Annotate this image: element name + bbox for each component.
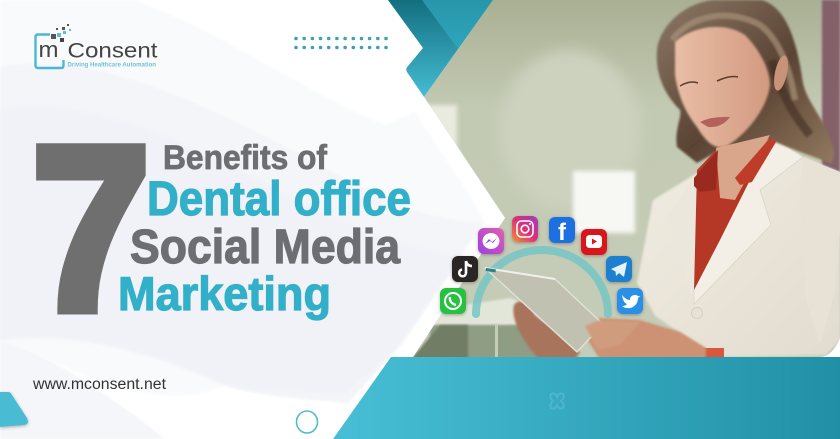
dot grid — [294, 37, 388, 49]
reach arc — [476, 250, 608, 314]
bottom teal band — [333, 357, 840, 439]
woman's hair — [657, 0, 834, 163]
icon: tiktok — [452, 256, 478, 282]
icon: instagram — [512, 216, 538, 242]
fingers over tablet — [585, 320, 640, 350]
woman's coat — [637, 140, 840, 357]
left teal tab — [0, 392, 28, 427]
website url: www.mconsent.net — [32, 376, 167, 393]
icon: facebook — [549, 217, 575, 246]
icon: faint cross mark — [550, 393, 564, 409]
icon: whatsapp — [440, 288, 466, 314]
icon: twitter — [617, 288, 643, 314]
right hand — [587, 318, 706, 360]
white edge band — [416, 97, 505, 224]
logo wordmark: Consent — [68, 38, 158, 62]
photo background wall — [400, 0, 840, 360]
social icons — [440, 216, 643, 314]
red shirt and neck — [694, 135, 776, 290]
cuff — [703, 348, 724, 357]
icon: telegram — [606, 256, 632, 282]
icon: messenger — [478, 228, 504, 254]
woman's face — [675, 27, 791, 147]
logo — [36, 24, 158, 68]
icon: facebook: f — [558, 219, 567, 246]
tablet — [485, 268, 606, 352]
blurred counter — [413, 298, 552, 357]
photo: doctor using tablet — [400, 0, 840, 360]
title line 2: Dental office — [147, 173, 411, 226]
decorative ring — [296, 411, 318, 433]
logo pixels — [51, 24, 71, 42]
logo tagline: Driving Healthcare Automation — [68, 62, 156, 68]
title line 4: Marketing — [118, 267, 331, 320]
title line 1: Benefits of — [163, 139, 328, 177]
left hand — [513, 301, 580, 360]
logo m: m — [38, 37, 58, 62]
big number 7: 7 — [32, 99, 150, 359]
teal corner shapes top — [388, 0, 493, 97]
title — [118, 139, 411, 320]
logo tablet frame — [36, 34, 64, 68]
icon: youtube — [581, 229, 607, 255]
blurred white cabinet and window — [425, 105, 635, 233]
title line 3: Social Media — [130, 221, 400, 274]
